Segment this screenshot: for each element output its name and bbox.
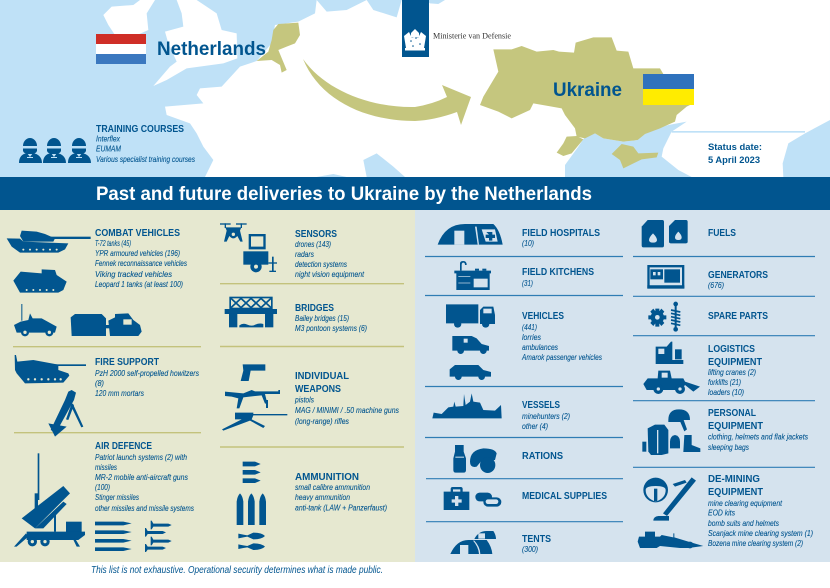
section: bridges — [225, 297, 367, 333]
heading: ammunition: AMMUNITION — [295, 472, 359, 483]
list: sensors: radars — [295, 249, 314, 259]
list: combat vehicles: T-72 tanks (45) — [95, 238, 131, 248]
section: tents — [450, 531, 551, 554]
section: rations — [453, 445, 563, 473]
section: individual weapons — [222, 364, 399, 431]
list: air defence: missiles — [95, 462, 117, 472]
list: logistics equipment: lifting cranes (2) — [708, 367, 756, 377]
list: de-mining equipment — [708, 498, 813, 548]
label: Netherlands: Netherlands — [157, 39, 266, 60]
icon: kitchen — [454, 261, 491, 290]
icon: Patriot launcher and missiles — [14, 453, 172, 552]
icon: ship — [432, 393, 502, 418]
list: air defence: Patriot launch systems (2) with — [95, 452, 187, 462]
heading: rations: RATIONS — [522, 451, 563, 462]
arrow: Netherlands to Ukraine — [303, 59, 471, 125]
icon: jerrycans — [642, 220, 688, 247]
icon: drone and radar cart — [220, 223, 277, 272]
heading: de-mining equipment — [708, 474, 763, 498]
quantity: field kitchens: (31) — [522, 278, 533, 288]
heading: de-mining equipment: DE-MINING — [708, 474, 760, 485]
heading: combat vehicles: COMBAT VEHICLES — [95, 228, 180, 239]
heading: generators: GENERATORS — [708, 270, 768, 281]
Ukraine map shape — [480, 37, 693, 168]
list: individual weapons: MAG / MINIMI / .50 machine guns — [295, 405, 399, 415]
label: Ukraine: Ukraine — [553, 80, 622, 101]
section: combat vehicles — [7, 228, 187, 336]
list: vehicles: Amarok passenger vehicles — [521, 352, 602, 362]
list: fire support — [95, 368, 199, 398]
list: sensors: detection systems — [295, 259, 347, 269]
list: training courses — [96, 134, 195, 164]
list: logistics equipment — [708, 367, 756, 397]
heading: individual weapons: INDIVIDUAL — [295, 371, 349, 382]
section: field kitchens — [454, 261, 594, 290]
icon: hospital tent — [438, 224, 503, 245]
icon: pistol and machine guns — [225, 364, 280, 408]
list: sensors: night vision equipment — [295, 269, 365, 279]
list: vessels: other (4) — [522, 421, 548, 431]
list: fire support: PzH 2000 self-propelled howitzers — [95, 368, 199, 378]
list: personal equipment — [708, 432, 808, 452]
heading: logistics equipment: LOGISTICS — [708, 344, 755, 355]
heading: bridges: BRIDGES — [295, 303, 334, 314]
icon: gear and spring — [648, 302, 680, 332]
section: fuels — [642, 220, 736, 247]
list: air defence — [95, 452, 194, 513]
list: vehicles: ambulances — [522, 342, 558, 352]
panel: left weapons panel — [0, 210, 415, 562]
section: de-mining equipment — [638, 474, 813, 548]
list: combat vehicles: Fennek reconnaissance vehicles — [95, 258, 187, 268]
section: ammunition — [237, 462, 387, 550]
list: bridges: M3 pontoon systems (6) — [295, 323, 367, 333]
heading: logistics equipment: EQUIPMENT — [708, 357, 762, 368]
list: combat vehicles: YPR armoured vehicles (196) — [95, 248, 180, 258]
status date — [708, 142, 762, 166]
section: field hospitals — [438, 224, 600, 248]
list: air defence: other missiles and missile systems — [95, 503, 194, 513]
section: generators — [647, 265, 768, 290]
list: bridges — [295, 313, 367, 333]
icon: tents — [450, 531, 496, 554]
heading: personal equipment — [708, 408, 763, 432]
icon: generator — [647, 265, 684, 289]
heading: personal equipment: EQUIPMENT — [708, 421, 763, 432]
icon: forklift and loader — [643, 342, 700, 394]
heading: fuels: FUELS — [708, 228, 736, 239]
list: air defence: MR-2 mobile anti-aircraft guns — [95, 472, 188, 482]
section: medical supplies — [444, 487, 607, 510]
section: training courses — [19, 124, 195, 164]
panel: right logistics panel — [415, 210, 830, 562]
list: training courses: EUMAM — [96, 144, 121, 154]
footnote: This list is not exhaustive. Operational security determines what is made public. — [91, 565, 383, 576]
list: combat vehicles — [95, 238, 187, 289]
list: ammunition: small calibre ammunition — [295, 482, 370, 492]
list: logistics equipment: loaders (10) — [708, 387, 744, 397]
section: personal equipment — [642, 408, 808, 455]
list: individual weapons: pistols — [294, 394, 314, 404]
map background — [0, 0, 830, 178]
list: air defence: (100) — [95, 482, 110, 492]
list: air defence: Stinger missiles — [95, 492, 139, 502]
icon: bottle, bread and apple — [453, 445, 497, 473]
logo: Ministerie van Defensie: Ministerie van Defensie — [433, 30, 511, 40]
list: training courses: Various specialist training courses — [96, 154, 195, 164]
heading: medical supplies: MEDICAL SUPPLIES — [522, 491, 607, 502]
heading: air defence: AIR DEFENCE — [95, 441, 152, 452]
list: de-mining equipment: EOD kits — [708, 508, 735, 518]
section: fire support — [15, 355, 199, 437]
icon: bridge — [225, 297, 277, 327]
list: training courses: Interflex — [96, 134, 121, 144]
heading: de-mining equipment: EQUIPMENT — [708, 487, 763, 498]
list: sensors — [295, 239, 365, 279]
list: de-mining equipment: Bozena mine clearing system (2) — [708, 538, 803, 548]
list: vessels — [522, 411, 570, 431]
list: combat vehicles: Viking tracked vehicles — [95, 269, 172, 279]
section: spare parts — [648, 302, 768, 332]
list: personal equipment: clothing, helmets and flak jackets — [708, 432, 808, 442]
icon: combat vehicles — [7, 231, 142, 336]
heading: tents: TENTS — [522, 534, 551, 545]
list: individual weapons: (long-range) rifles — [295, 416, 349, 426]
icon: howitzer and mortar — [15, 355, 86, 437]
list: de-mining equipment: bomb suits and helmets — [708, 518, 779, 528]
list: fire support: (8) — [95, 378, 104, 388]
status date: Status date: — [708, 142, 762, 153]
list: vehicles: (441) — [522, 322, 537, 332]
list: vessels: minehunters (2) — [522, 411, 570, 421]
list: logistics equipment: forklifts (21) — [708, 377, 741, 387]
flag: Netherlands — [96, 34, 146, 64]
heading: fire support: FIRE SUPPORT — [95, 357, 159, 368]
heading: spare parts: SPARE PARTS — [708, 311, 768, 322]
heading: individual weapons: WEAPONS — [295, 384, 341, 395]
section: sensors — [220, 223, 365, 279]
list: ammunition: anti-tank (LAW + Panzerfaust) — [295, 502, 387, 512]
icon: first-aid kit and pills — [444, 487, 501, 510]
status date: 5 April 2023 — [708, 155, 760, 166]
quantity: generators: (676) — [708, 280, 724, 290]
list: fire support: 120 mm mortars — [95, 388, 144, 398]
heading: logistics equipment — [708, 344, 762, 368]
icon: ammunition — [237, 462, 266, 550]
heading: training courses: TRAINING COURSES — [96, 124, 184, 135]
section: vehicles — [446, 304, 602, 380]
heading: personal equipment: PERSONAL — [708, 408, 756, 419]
flag: Ukraine — [643, 74, 694, 105]
list: sensors: drones (143) — [295, 239, 331, 249]
logo: Ministerie van Defensie — [402, 0, 511, 57]
icon: truck, ambulance and car — [446, 304, 495, 380]
list: combat vehicles: Leopard 1 tanks (at least 100) — [95, 279, 183, 289]
heading: individual weapons — [295, 371, 349, 395]
list: ammunition: heavy ammunition — [295, 492, 350, 502]
heading: vehicles: VEHICLES — [522, 311, 564, 322]
list: bridges: Bailey bridges (15) — [295, 313, 349, 323]
icon: bomb helmet, detector and mine clearing vehicle — [638, 477, 703, 548]
quantity: tents: (300) — [522, 544, 538, 554]
section: vessels — [432, 393, 570, 431]
heading: vessels: VESSELS — [522, 400, 560, 411]
title banner: Past and future deliveries to Ukraine by the Netherlands — [96, 183, 592, 205]
section: air defence — [14, 441, 194, 552]
list: vehicles: lorries — [522, 332, 541, 342]
Netherlands map shape — [257, 23, 300, 73]
heading: field kitchens: FIELD KITCHENS — [522, 267, 594, 278]
icon: three soldiers — [19, 138, 91, 163]
heading: field hospitals: FIELD HOSPITALS — [522, 228, 600, 239]
list: vehicles — [521, 322, 602, 362]
icon: helmet, jacket, bag and boot — [642, 409, 700, 455]
section: logistics equipment — [643, 342, 762, 397]
quantity: field hospitals: (10) — [522, 238, 534, 248]
list: de-mining equipment: mine clearing equipment — [708, 498, 783, 508]
title banner — [0, 177, 830, 210]
list: personal equipment: sleeping bags — [708, 442, 749, 452]
list: ammunition — [295, 482, 387, 512]
heading: sensors: SENSORS — [295, 229, 337, 240]
list: individual weapons — [294, 394, 399, 426]
